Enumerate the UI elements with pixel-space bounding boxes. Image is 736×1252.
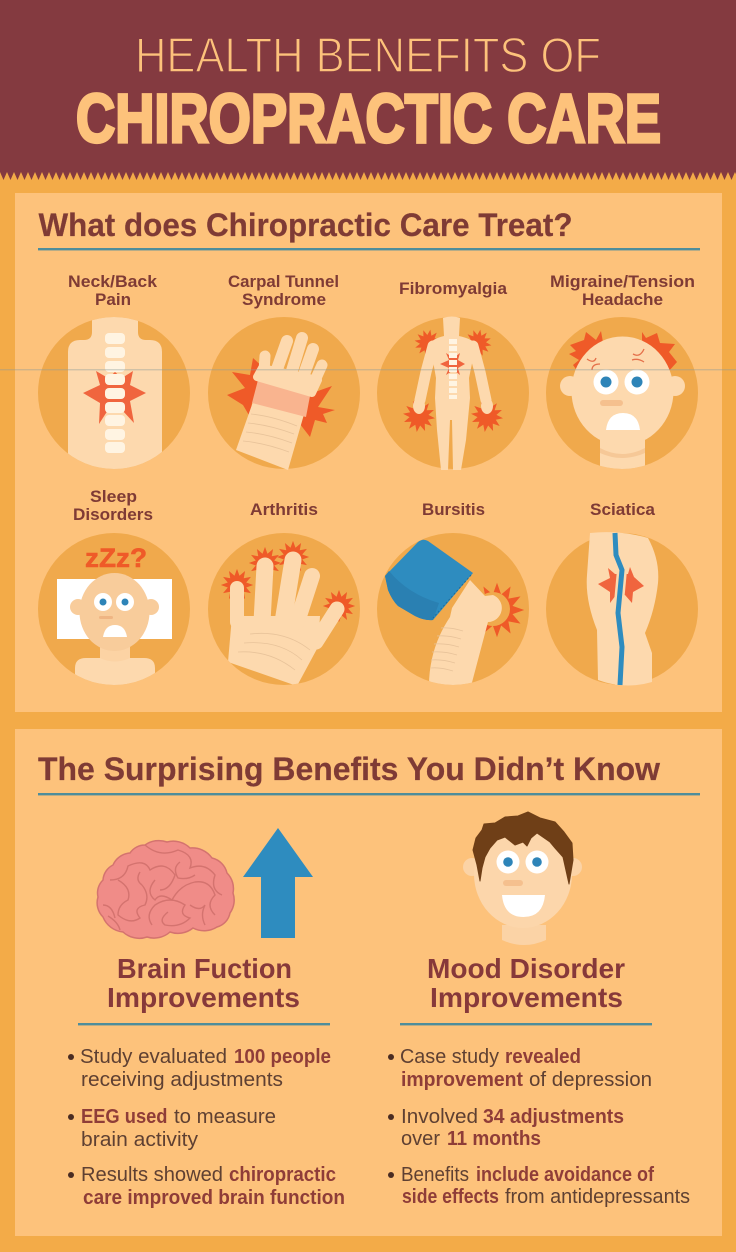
icon: happy face	[463, 812, 582, 945]
heading: treat: What does Chiropractic Care Treat?	[38, 207, 572, 243]
condition: fibromyalgia	[377, 279, 529, 470]
zzz text: zZz?	[85, 543, 147, 573]
icon: shoulder with sleeve	[377, 533, 529, 690]
label: carpal tunnel syndrome: Carpal Tunnel	[228, 272, 339, 291]
bullet: EEG	[68, 1106, 276, 1151]
label: neck/back pain: Neck/Back	[68, 272, 158, 291]
condition: sleep disorders	[38, 487, 190, 695]
label: neck/back pain: Pain	[95, 290, 131, 309]
bullet: case study: Case study	[400, 1046, 499, 1068]
label: sleep disorders: Sleep	[90, 487, 137, 506]
condition: arthritis	[208, 500, 360, 686]
bullet: benefits: include avoidance of	[476, 1164, 654, 1186]
heading: surprising benefits: The Surprising Benefits You Didn’t Know	[38, 751, 660, 787]
label: neck/back pain	[68, 272, 158, 309]
condition: sciatica	[546, 500, 698, 686]
label: migraine/tension headache: Headache	[582, 290, 663, 309]
bullet: benefits: from antidepressants	[505, 1186, 690, 1208]
icon: body with pain points	[377, 316, 529, 470]
bullet: results	[68, 1164, 345, 1209]
title: first line: HEALTH BENEFITS OF	[135, 29, 601, 83]
bullet: case study: revealed	[505, 1046, 581, 1068]
bullet: case study	[388, 1046, 652, 1091]
header banner	[0, 0, 736, 181]
bullet: case study: improvement	[401, 1069, 523, 1091]
subheading: brain function: Improvements	[107, 982, 300, 1013]
subheading: brain function	[107, 953, 300, 1013]
condition: neck/back pain	[38, 272, 190, 475]
bullet: benefits: side effects	[402, 1186, 499, 1208]
column: mood disorder improvements	[388, 953, 690, 1208]
subheading: mood disorder	[427, 953, 625, 1013]
subheading: mood disorder: Mood Disorder	[427, 953, 625, 984]
bullet: EEG: to measure	[174, 1106, 276, 1128]
label: sleep disorders	[73, 487, 153, 524]
bullet: 34 adjustments: Involved	[401, 1106, 478, 1128]
condition: bursitis	[377, 500, 529, 690]
label: sciatica: Sciatica	[590, 500, 656, 519]
icon: sleepless person	[38, 533, 190, 695]
bullet: 34 adjustments: over	[401, 1128, 440, 1150]
label: migraine/tension headache	[550, 272, 695, 309]
label: fibromyalgia: Fibromyalgia	[399, 279, 508, 298]
panel: surprising benefits	[15, 729, 722, 1236]
bullet: benefits	[388, 1164, 690, 1208]
bullet: results: Results showed	[81, 1164, 223, 1186]
bullet: results: chiropractic	[229, 1164, 336, 1186]
panel: what does chiropractic care treat	[15, 193, 722, 712]
label: carpal tunnel syndrome	[228, 272, 339, 309]
icon: spine on torso	[38, 315, 190, 475]
bullet: case study: of depression	[529, 1069, 652, 1091]
label: arthritis: Arthritis	[250, 500, 318, 519]
bullet: 34 adjustments	[388, 1106, 624, 1150]
label: sleep disorders: Disorders	[73, 505, 153, 524]
bullet: results: care improved brain function	[83, 1187, 345, 1209]
icon: leg with sciatic nerve	[546, 532, 698, 686]
bullet: EEG: EEG used	[81, 1106, 168, 1128]
condition: carpal tunnel syndrome	[208, 272, 360, 470]
bullet: 100 people: receiving adjustments	[81, 1069, 283, 1091]
column: brain function improvements	[68, 953, 345, 1209]
icon: up arrow	[243, 828, 313, 938]
bullet: EEG: brain activity	[81, 1129, 198, 1151]
label: bursitis: Bursitis	[422, 500, 485, 519]
label: carpal tunnel syndrome: Syndrome	[242, 290, 326, 309]
icon: face with headache	[546, 317, 698, 475]
icon: wrist	[208, 317, 360, 470]
label: migraine/tension headache: Migraine/Tension	[550, 272, 695, 291]
bullet: benefits: Benefits	[401, 1164, 469, 1186]
condition: migraine/tension headache	[546, 272, 698, 475]
icon: arthritic hand	[208, 533, 360, 686]
bullet: 100 people: 100 people	[234, 1046, 331, 1068]
subheading: mood disorder: Improvements	[430, 982, 623, 1013]
icon: brain	[97, 841, 234, 938]
bullet: 34 adjustments: 34 adjustments	[483, 1106, 624, 1128]
bullet: 100 people: Study evaluated	[80, 1046, 227, 1068]
bullet: 100 people	[68, 1046, 331, 1091]
bullet: 34 adjustments: 11 months	[447, 1128, 541, 1150]
subheading: brain function: Brain Fuction	[117, 953, 292, 984]
